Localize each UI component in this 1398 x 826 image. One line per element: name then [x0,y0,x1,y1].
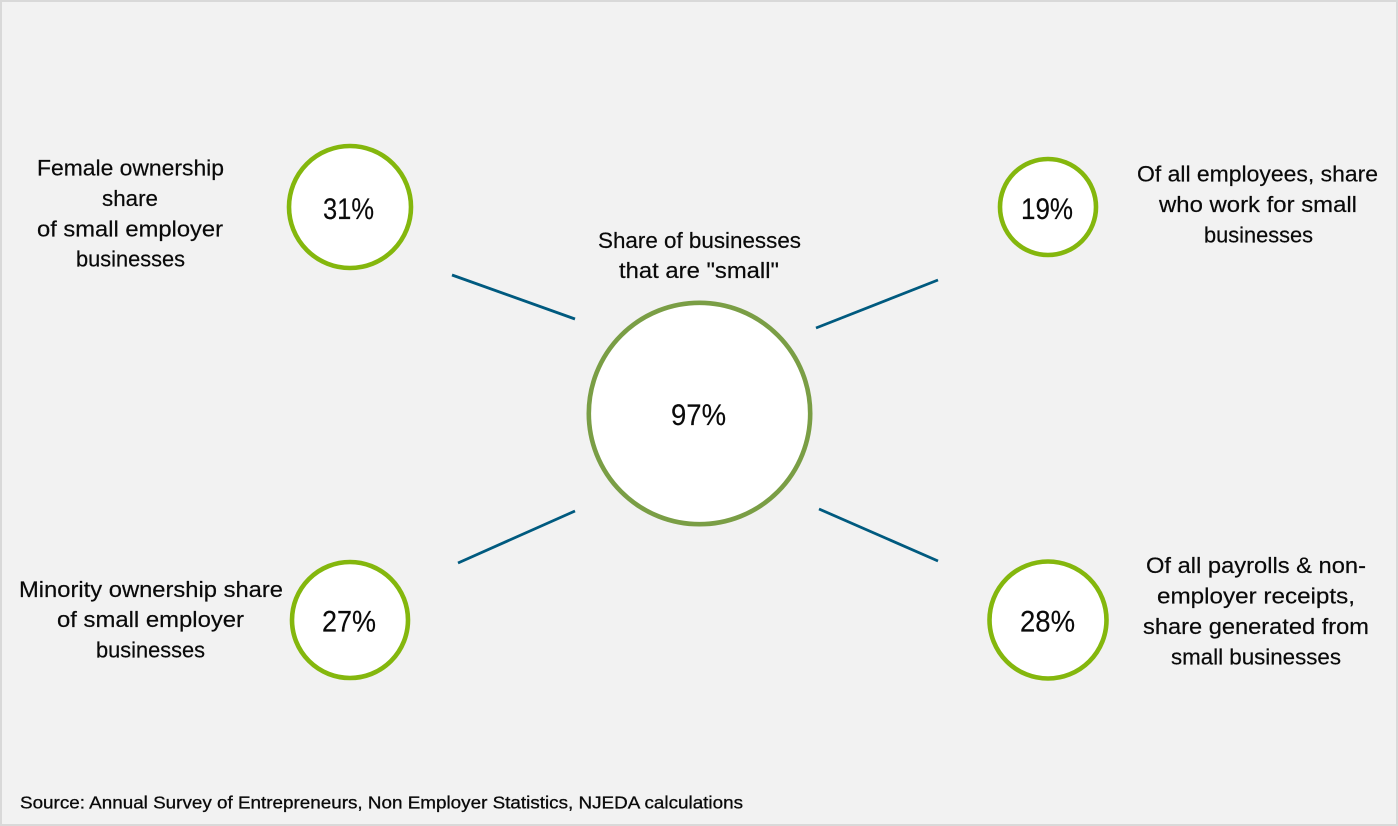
circle: 28%: 28% [1020,606,1075,638]
circle: 19% [1000,159,1096,255]
label: female ownership: share [102,186,158,211]
label: payrolls: Of all payrolls & non- [1146,553,1366,578]
label: payrolls: share generated from [1143,614,1369,639]
circle: 19%: 19% [1021,193,1073,226]
label: payrolls: employer receipts, [1157,584,1355,608]
label: minority ownership [19,577,283,662]
label: employees: who work for small [1158,192,1357,217]
circle: 31%: 31% [323,193,374,226]
label: minority ownership: Minority ownership share [19,577,283,602]
central label: that are "small" [619,258,779,283]
central circle: 97% [589,303,810,524]
central circle: 97%: 97% [671,399,726,432]
central label: Share of businesses [598,228,801,253]
label: female ownership [37,156,224,272]
label: female ownership: businesses [76,246,185,272]
connector line: top left [452,275,575,319]
source note: Source: Annual Survey of Entrepreneurs, Non Employer Statistics, NJEDA calculations [20,792,743,812]
central label [598,228,801,283]
label: employees [1137,162,1378,248]
circle: 31% [289,146,411,268]
label: employees: businesses [1204,222,1313,248]
label: female ownership: Female ownership [37,156,224,180]
connector line: top right [816,280,938,328]
label: payrolls [1143,553,1369,670]
circle: 27%: 27% [322,606,376,638]
connector line: bottom left [458,511,575,563]
circle: 28% [990,562,1106,678]
label: payrolls: small businesses [1171,644,1341,670]
circle: 27% [292,562,408,678]
label: female ownership: of small employer [37,216,223,242]
label: employees: Of all employees, share [1137,162,1378,186]
label: minority ownership: businesses [96,638,205,662]
label: minority ownership: of small employer [57,607,244,632]
connector line: bottom right [819,509,938,561]
